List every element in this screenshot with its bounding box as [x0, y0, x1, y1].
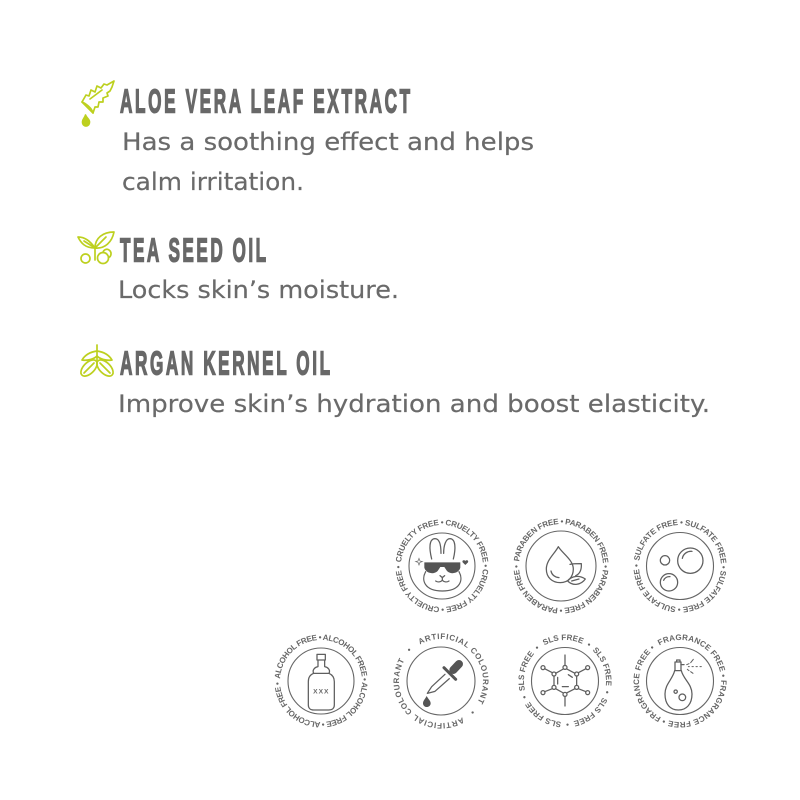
badge: fragrance free: FRAGRANCE FREE • FRAGRANCE FREE • FRAGRANCE FREE •	[634, 634, 727, 728]
badge: sulfate free: SULFATE FREE • SULFATE FREE • SULFATE FREE • SULFATE FREE •	[634, 520, 726, 612]
text: argan kernel oil description: Improve skin’s hydration and boost elasticity.	[118, 390, 710, 418]
text: aloe vera description: Has a soothing effect and helps	[122, 128, 534, 156]
badge: sls free: SLS FREE • SLS FREE • SLS FREE • SLS FREE • SLS FREE •	[518, 634, 612, 728]
icon: rabbit with sunglasses	[416, 539, 468, 591]
icon: aloe leaf with drop	[82, 81, 114, 126]
text: aloe vera description	[122, 128, 534, 196]
icon: tea sprout and seeds	[78, 232, 114, 264]
icon: bottle: XXX	[313, 688, 329, 695]
badge: paraben free: PARABEN FREE • PARABEN FREE • PARABEN FREE • PARABEN FREE •	[514, 518, 608, 614]
text: tea seed oil description: Locks skin’s moisture.	[118, 276, 399, 304]
icon: perfume bottle	[665, 659, 701, 710]
heading: tea seed oil: TEA SEED OIL	[120, 231, 266, 269]
badge: alcohol free: ALCOHOL FREE • ALCOHOL FREE • ALCOHOL FREE • ALCOHOL FREE •	[274, 634, 368, 728]
text: aloe vera description: calm irritation.	[122, 168, 304, 196]
heading: argan kernel oil: ARGAN KERNEL OIL	[120, 344, 330, 382]
badge: cruelty free: CRUELTY FREE • CRUELTY FREE • CRUELTY FREE • CRUELTY FREE •	[396, 520, 488, 612]
icon: bubbles	[660, 548, 703, 591]
icon: molecule	[541, 655, 590, 706]
icon: argan branch	[78, 345, 116, 379]
badge: artificial colourant: ARTIFICIAL COLOURANT • ARTIFICIAL COLOURANT •	[394, 633, 488, 729]
heading: aloe vera leaf extract: ALOE VERA LEAF EXTRACT	[120, 82, 410, 120]
icon: dropper	[423, 664, 459, 707]
icon: drop with leaves	[546, 547, 585, 584]
